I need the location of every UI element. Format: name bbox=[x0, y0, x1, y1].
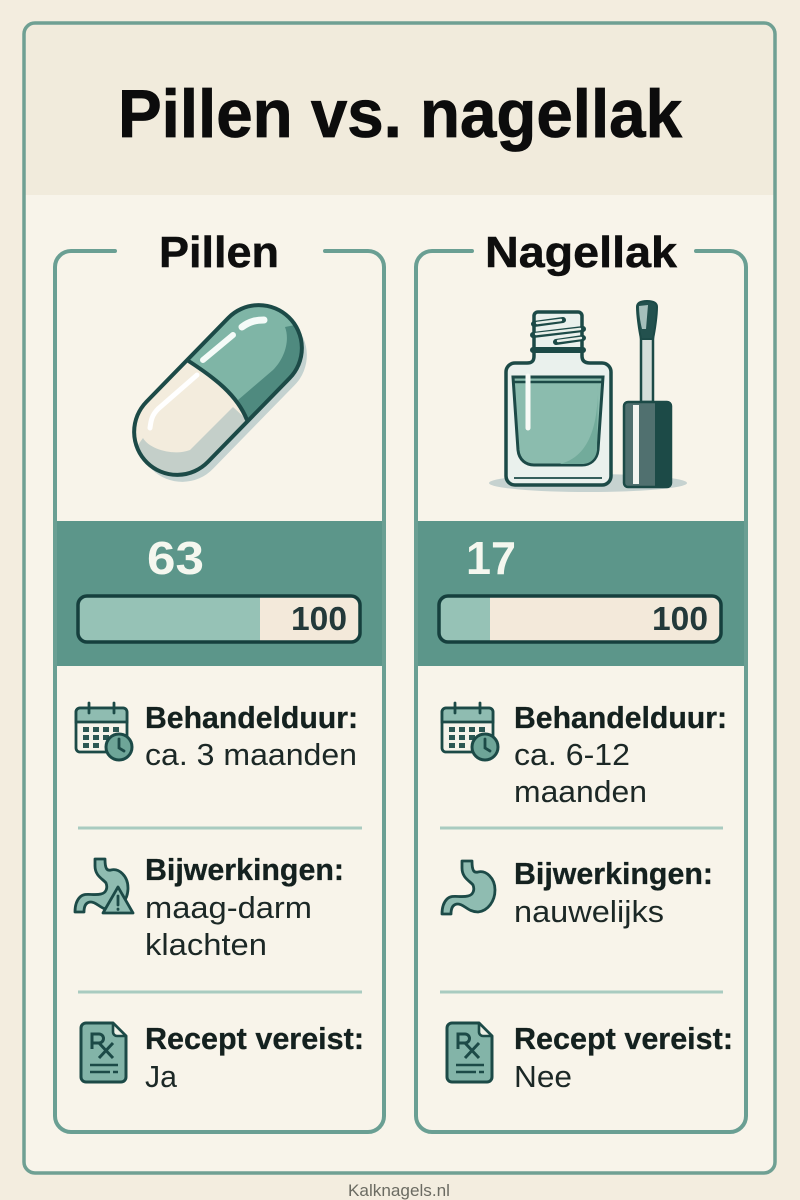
row: Bijwerkingen: nauwelijks bbox=[514, 895, 664, 929]
row: Recept vereist: Recept vereist: bbox=[514, 1022, 733, 1056]
score 63: 63 bbox=[147, 532, 204, 584]
row: Behandelduur bbox=[442, 701, 727, 809]
Nagellak heading: Nagellak bbox=[485, 228, 678, 277]
icon: stomach bbox=[442, 861, 495, 914]
row: Behandelduur: Behandelduur: bbox=[145, 701, 358, 735]
icon: calendar bbox=[76, 703, 132, 760]
row: Recept vereist: Recept vereist: bbox=[145, 1022, 364, 1056]
row: Bijwerkingen: klachten bbox=[145, 928, 267, 962]
title: Pillen vs. nagellak bbox=[118, 76, 682, 152]
row: Recept vereist: Nee bbox=[514, 1060, 572, 1094]
row: Bijwerkingen bbox=[442, 857, 713, 929]
title band bbox=[24, 23, 776, 195]
row: Behandelduur: maanden bbox=[514, 775, 647, 809]
Nagellak panel border bbox=[416, 251, 746, 1132]
row: Recept vereist bbox=[447, 1022, 733, 1094]
row: Recept vereist: Ja bbox=[145, 1060, 177, 1094]
row: Recept vereist bbox=[81, 1022, 364, 1094]
score bar bbox=[439, 596, 721, 642]
row: Bijwerkingen: Bijwerkingen: bbox=[514, 857, 713, 891]
panel: Pillen bbox=[55, 228, 384, 1132]
score bar bbox=[78, 596, 360, 642]
icon: stomach with warning bbox=[75, 859, 133, 913]
row: Bijwerkingen bbox=[75, 853, 344, 962]
Nagellak colour band bbox=[417, 521, 745, 666]
Pillen colour band bbox=[56, 521, 383, 666]
row: Behandelduur: ca. 6-12 bbox=[514, 738, 630, 772]
panel: Nagellak bbox=[416, 228, 746, 1132]
score bar: 100 bbox=[652, 600, 708, 637]
score bar: 100 bbox=[291, 600, 347, 637]
icon: prescription bbox=[447, 1023, 492, 1082]
icon: capsule bbox=[132, 303, 307, 482]
Pillen heading: Pillen bbox=[159, 228, 279, 277]
Pillen panel border bbox=[55, 251, 384, 1132]
row: Behandelduur: ca. 3 maanden bbox=[145, 738, 357, 772]
footer credit: Kalknagels.nl bbox=[348, 1181, 450, 1200]
icon: nail polish bottle and brush bbox=[489, 301, 687, 492]
score 17: 17 bbox=[466, 532, 516, 584]
icon: prescription bbox=[81, 1023, 126, 1082]
row: Bijwerkingen: Bijwerkingen: bbox=[145, 853, 344, 887]
row: Behandelduur bbox=[76, 701, 358, 772]
row: Behandelduur: Behandelduur: bbox=[514, 701, 727, 735]
row: Bijwerkingen: maag-darm bbox=[145, 891, 312, 925]
icon: calendar bbox=[442, 703, 498, 760]
